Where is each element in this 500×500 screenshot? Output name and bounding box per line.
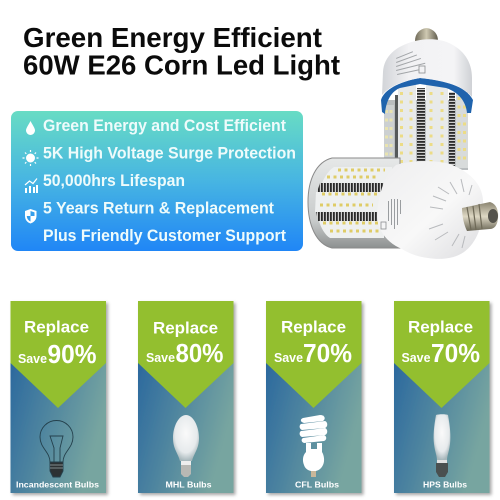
panel: features <box>11 111 303 251</box>
savings <box>146 338 224 368</box>
panel: CFL card <box>266 301 362 493</box>
vent marks <box>429 179 472 248</box>
icon: shield <box>25 209 36 224</box>
white housing <box>382 39 472 97</box>
title: 60W E26 Corn Led Light <box>23 50 340 80</box>
caption: MHL Bulbs <box>166 480 212 490</box>
feature text: Plus Friendly Customer Support <box>43 227 286 245</box>
label text block <box>381 199 401 229</box>
savings: Save <box>146 351 175 365</box>
white housing <box>377 161 483 259</box>
panel: incandescent card <box>10 301 106 493</box>
icon: CFL bulb <box>300 415 327 477</box>
replace heading: Replace <box>281 318 346 336</box>
savings <box>402 338 480 368</box>
blue ring <box>381 78 473 114</box>
feature text <box>43 117 296 245</box>
feature text: 5 Years Return & Replacement <box>43 200 274 218</box>
savings <box>18 339 96 369</box>
panel: MHL card <box>138 301 234 493</box>
panel: HPS card <box>394 301 490 493</box>
replace heading: Replace <box>408 318 473 336</box>
savings: 70% <box>431 338 480 368</box>
savings: Save <box>402 351 431 365</box>
savings: Save <box>18 352 47 366</box>
savings: 70% <box>303 338 352 368</box>
feature text: 50,000hrs Lifespan <box>43 172 185 190</box>
icon: incandescent bulb <box>40 421 73 477</box>
savings <box>274 338 352 368</box>
icon: water drop <box>26 121 35 135</box>
led section <box>384 100 468 170</box>
feature text: Green Energy and Cost Efficient <box>43 117 286 135</box>
socket <box>462 202 498 231</box>
caption: CFL Bulbs <box>295 480 339 490</box>
replace heading: Replace <box>24 318 89 336</box>
caption: HPS Bulbs <box>423 480 467 490</box>
feature text: 5K High Voltage Surge Protection <box>43 144 296 162</box>
savings: 90% <box>48 339 96 369</box>
icon: growth chart <box>25 178 38 193</box>
savings: Save <box>274 351 303 365</box>
replace heading: Replace <box>153 320 218 338</box>
label text block <box>396 51 425 75</box>
glass cover <box>308 158 400 248</box>
savings: 80% <box>176 338 224 368</box>
title: Green Energy Efficient <box>23 22 322 53</box>
title <box>23 22 340 80</box>
icon: sun <box>22 150 38 166</box>
icon: MHL bulb <box>173 415 199 477</box>
screw base <box>415 28 438 41</box>
product image: upper corn lamp <box>381 28 473 170</box>
product image: lower corn lamp <box>308 158 498 259</box>
caption: Incandescent Bulbs <box>16 480 99 490</box>
icon: HPS bulb <box>434 414 450 477</box>
